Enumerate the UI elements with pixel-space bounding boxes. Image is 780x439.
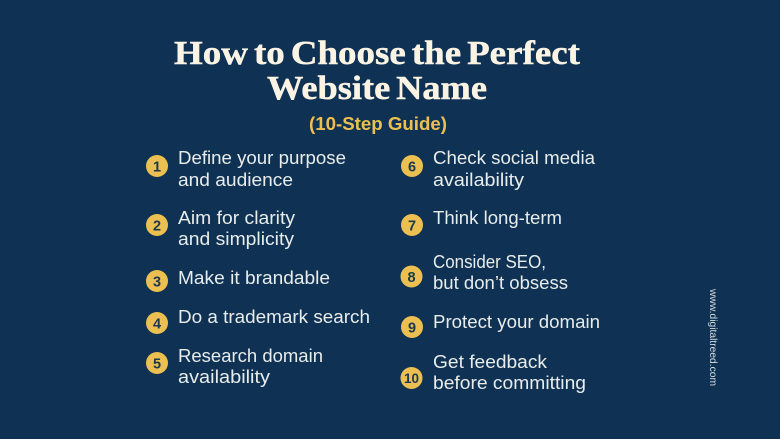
step 4: Do a trademark search [178, 307, 370, 327]
title: Website Name [267, 70, 487, 107]
step 6: Check social media [433, 148, 596, 168]
step 4: 4 [153, 316, 161, 332]
step 1: and audience [178, 170, 293, 190]
subtitle: (10-Step Guide) [309, 114, 447, 134]
step 10 [400, 352, 586, 393]
step 2: Aim for clarity [178, 208, 295, 228]
step 2: and simplicity [178, 229, 294, 249]
step 8: 8 [407, 270, 416, 286]
step 6: availability [433, 170, 524, 190]
step 5: availability [178, 367, 270, 387]
step 1: Define your purpose [178, 148, 346, 168]
step 6: 6 [408, 160, 416, 176]
step 6 [401, 148, 596, 190]
step 7 [401, 208, 562, 236]
step 10: Get feedback [433, 352, 548, 372]
step 4 [146, 307, 370, 334]
step 2: 2 [153, 218, 161, 234]
title: How to Choose the Perfect [174, 35, 581, 72]
step 8 [400, 252, 568, 293]
step 2 [146, 208, 295, 249]
step 5: 5 [153, 356, 161, 372]
step 1: 1 [153, 160, 161, 176]
step 10: before committing [433, 373, 586, 393]
step 8: but don’t obsess [433, 273, 568, 293]
title [174, 35, 581, 107]
step 9: Protect your domain [433, 312, 600, 332]
step 8: Consider SEO, [433, 252, 546, 272]
step 5: Research domain [178, 346, 323, 366]
step 3: 3 [153, 274, 161, 290]
step 10: 10 [404, 371, 419, 386]
step 1 [146, 148, 346, 190]
step 3: Make it brandable [178, 268, 330, 288]
step 9 [401, 312, 600, 338]
step 7: Think long-term [433, 208, 562, 228]
step 9: 9 [408, 320, 416, 336]
step 3 [146, 268, 330, 292]
step 5 [146, 346, 323, 387]
website url: www.digitaltreed.com [707, 288, 718, 386]
step 7: 7 [408, 218, 416, 234]
